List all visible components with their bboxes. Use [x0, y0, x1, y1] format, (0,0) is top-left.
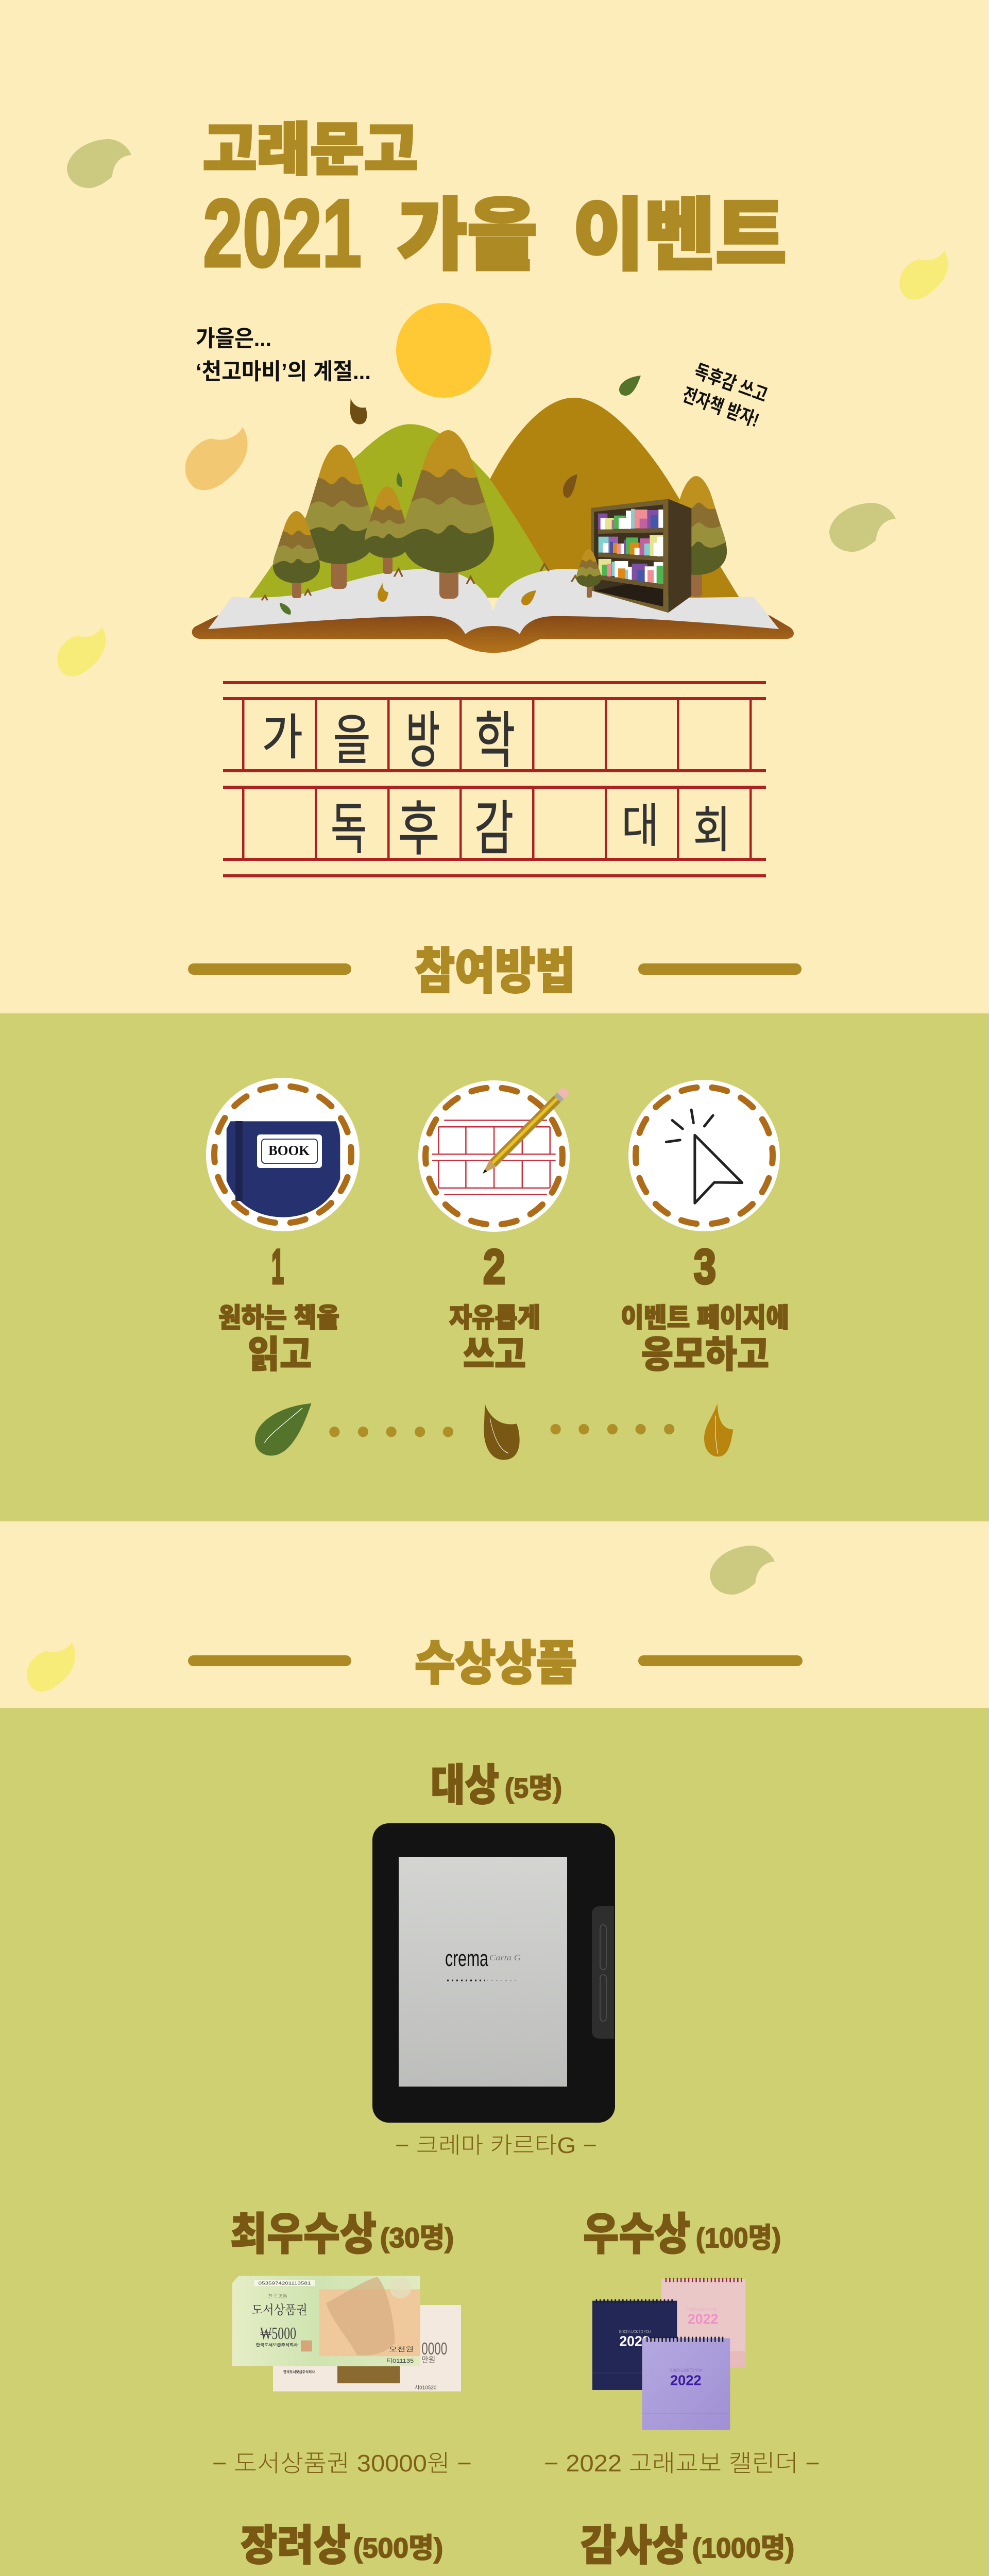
step 2 text: 쓰고 — [463, 1334, 526, 1376]
prize heading: top excellence: (30명) — [380, 2223, 454, 2253]
tree: front left — [273, 511, 320, 598]
prize heading: grand prize — [431, 1761, 562, 1809]
product: calendars: GOOD LUCK TO YOU — [687, 2308, 718, 2312]
caption: calendars: − 2022 고래교보 캘린더 − — [544, 2450, 820, 2477]
prize heading: top excellence: 최우수상 — [230, 2210, 377, 2259]
leaf: yellow bottom left — [57, 627, 106, 676]
icon: brown leaf — [484, 1404, 520, 1460]
bookshelf — [591, 499, 691, 613]
grid text: 가을방학: 방 — [406, 707, 440, 774]
prize heading: encouragement: (500명) — [353, 2533, 443, 2564]
handwritten note: autumn: 가을은... — [196, 326, 271, 351]
grid text: 독후감 대회 — [331, 796, 730, 862]
product: e-reader — [372, 1823, 615, 2123]
title — [203, 118, 787, 287]
leaf: yellow right — [899, 250, 948, 299]
step 1 text — [218, 1240, 339, 1376]
leaf: yellow mid — [27, 1642, 75, 1691]
title: 고래문고 — [203, 118, 418, 182]
leaf: pale green mid — [710, 1546, 775, 1595]
product: calendars: 2022 — [619, 2333, 650, 2349]
product: calendars: 2022 — [688, 2311, 718, 2327]
panel: steps — [0, 1013, 989, 1521]
prize heading: excellence: (100명) — [696, 2223, 781, 2253]
prize heading: encouragement: 장려상 — [241, 2522, 350, 2569]
tree: back left — [305, 445, 372, 589]
tree: tiny beside shelf — [576, 549, 601, 598]
handwritten note: e-book: 전자책 받자! — [679, 384, 762, 431]
panel: prizes — [0, 1708, 989, 2576]
product: calendars: GOOD LUCK TO YOU — [619, 2329, 651, 2334]
product: book vouchers: 한국도서보급주식회사 — [256, 2343, 298, 2347]
step 3 text — [621, 1240, 789, 1376]
prize heading: excellence — [583, 2210, 781, 2259]
tree: small centre — [365, 486, 405, 574]
step 2 icon: writing paper and pencil — [418, 1080, 570, 1232]
product: book vouchers: 0535974201113581 — [259, 2280, 311, 2285]
product: book vouchers: 0000 — [421, 2340, 447, 2359]
product: book vouchers: 티011135 — [386, 2358, 414, 2364]
leaf: orange left — [185, 427, 248, 490]
step 1 text: 읽고 — [248, 1334, 312, 1376]
product: book vouchers: 도서상품권 — [251, 2303, 308, 2317]
heading: how to participate — [188, 944, 802, 999]
heading: prizes: 수상상품 — [415, 1637, 577, 1690]
icon: green leaf — [255, 1403, 311, 1455]
prize heading: appreciation: (1000명) — [692, 2533, 794, 2564]
prize heading: grand prize: (5명) — [505, 1773, 562, 1804]
dots — [329, 1424, 674, 1437]
product: e-reader: crema — [445, 1946, 488, 1971]
grid text: 독후감 대회: 회 — [693, 803, 730, 858]
step 3 text: 이벤트 페이지에 — [621, 1303, 789, 1333]
product: e-reader: Carta G — [489, 1954, 521, 1962]
product: book vouchers: 만원 — [421, 2355, 435, 2364]
product: calendars: 2022 — [670, 2372, 702, 2388]
heading: prizes — [188, 1637, 803, 1690]
grid text: 독후감 대회: 대 — [622, 800, 659, 852]
tree: large centre — [402, 430, 494, 599]
heading: how to participate: 참여방법 — [415, 944, 575, 999]
prize heading: encouragement — [241, 2522, 443, 2569]
step 1 text: 원하는 책을 — [218, 1303, 339, 1333]
prize heading: excellence: 우수상 — [583, 2210, 690, 2259]
panel: hero — [57, 118, 948, 877]
leaf: pale green right — [829, 503, 896, 552]
caption: vouchers: − 도서상품권 30000원 − — [212, 2450, 472, 2477]
product: calendars: GOOD LUCK TO YOU — [670, 2368, 702, 2372]
grid text: 독후감 대회: 후 — [398, 796, 439, 862]
step 2 text: 자유롭게 — [449, 1303, 540, 1333]
step 2 text — [449, 1240, 540, 1376]
book cover and pages — [192, 564, 794, 653]
product: book vouchers: 한국도서보급주식회사 — [283, 2369, 315, 2374]
falling leaves — [280, 376, 641, 615]
step 1 icon: book — [206, 1078, 360, 1231]
grid lines — [223, 681, 766, 877]
icon: gold leaf — [704, 1403, 733, 1456]
illustration: open book with trees and bookshelf — [192, 376, 794, 653]
prize heading: appreciation — [581, 2522, 794, 2569]
tree: behind bookshelf — [668, 476, 727, 597]
handwritten note: e-book — [679, 360, 770, 431]
icon: sun — [396, 303, 491, 398]
caption: e-reader: − 크레마 카르타G − — [395, 2133, 597, 2158]
title: 이벤트 — [573, 192, 787, 280]
icon: pencil — [480, 1087, 570, 1177]
grid text: 독후감 대회: 독 — [331, 798, 367, 860]
prize heading: appreciation: 감사상 — [581, 2522, 688, 2569]
grid text: 독후감 대회: 감 — [474, 796, 514, 862]
handwritten note: autumn — [196, 326, 371, 384]
product: book vouchers: ₩5000 — [260, 2324, 296, 2343]
title: 가을 — [397, 192, 537, 280]
step 3 text: 응모하고 — [641, 1334, 769, 1376]
step 1 icon: book: BOOK — [268, 1143, 310, 1158]
handwritten note: e-book: 독후감 쓰고 — [691, 360, 770, 406]
product: book vouchers: 전국 공통 — [268, 2294, 287, 2299]
mountains — [249, 398, 739, 598]
title: 2021 — [203, 179, 362, 287]
step 3 text: 3 — [694, 1240, 716, 1294]
product: book vouchers: 오천원 — [389, 2345, 414, 2353]
product: book vouchers — [232, 2276, 461, 2392]
product: book vouchers: 시010520 — [415, 2384, 437, 2391]
grid text: 가을방학: 을 — [333, 710, 370, 771]
leaf: pale green top left — [67, 139, 131, 188]
grid text: 가을방학 — [262, 706, 515, 775]
writing paper title grid — [223, 681, 766, 877]
prize heading: grand prize: 대상 — [431, 1761, 499, 1809]
step 3 icon: cursor — [628, 1080, 780, 1231]
grid text: 가을방학: 학 — [475, 706, 515, 775]
step 2 text: 2 — [483, 1240, 505, 1294]
step 1 text: 1 — [271, 1240, 284, 1294]
grid text: 가을방학: 가 — [262, 710, 303, 765]
product: calendars — [592, 2279, 745, 2430]
handwritten note: autumn: ‘천고마비’의 계절... — [196, 359, 371, 384]
leaf and dots progress row — [255, 1403, 733, 1460]
